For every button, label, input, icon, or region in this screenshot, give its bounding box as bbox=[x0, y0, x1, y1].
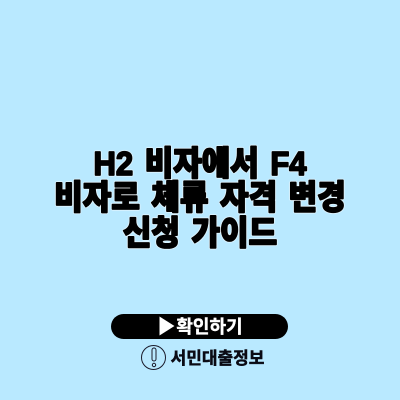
brand name: 서민대출정보 bbox=[171, 349, 264, 368]
title bbox=[54, 145, 346, 252]
icon: exclamation circle bbox=[142, 346, 166, 370]
button: confirm bbox=[111, 314, 288, 339]
title: H2 비자에서 F4 bbox=[93, 145, 307, 182]
title: 비자로 체류 자격 변경 bbox=[54, 179, 346, 216]
button: confirm: 확인하기 bbox=[176, 317, 243, 337]
title: 신청 가이드 bbox=[123, 214, 277, 252]
